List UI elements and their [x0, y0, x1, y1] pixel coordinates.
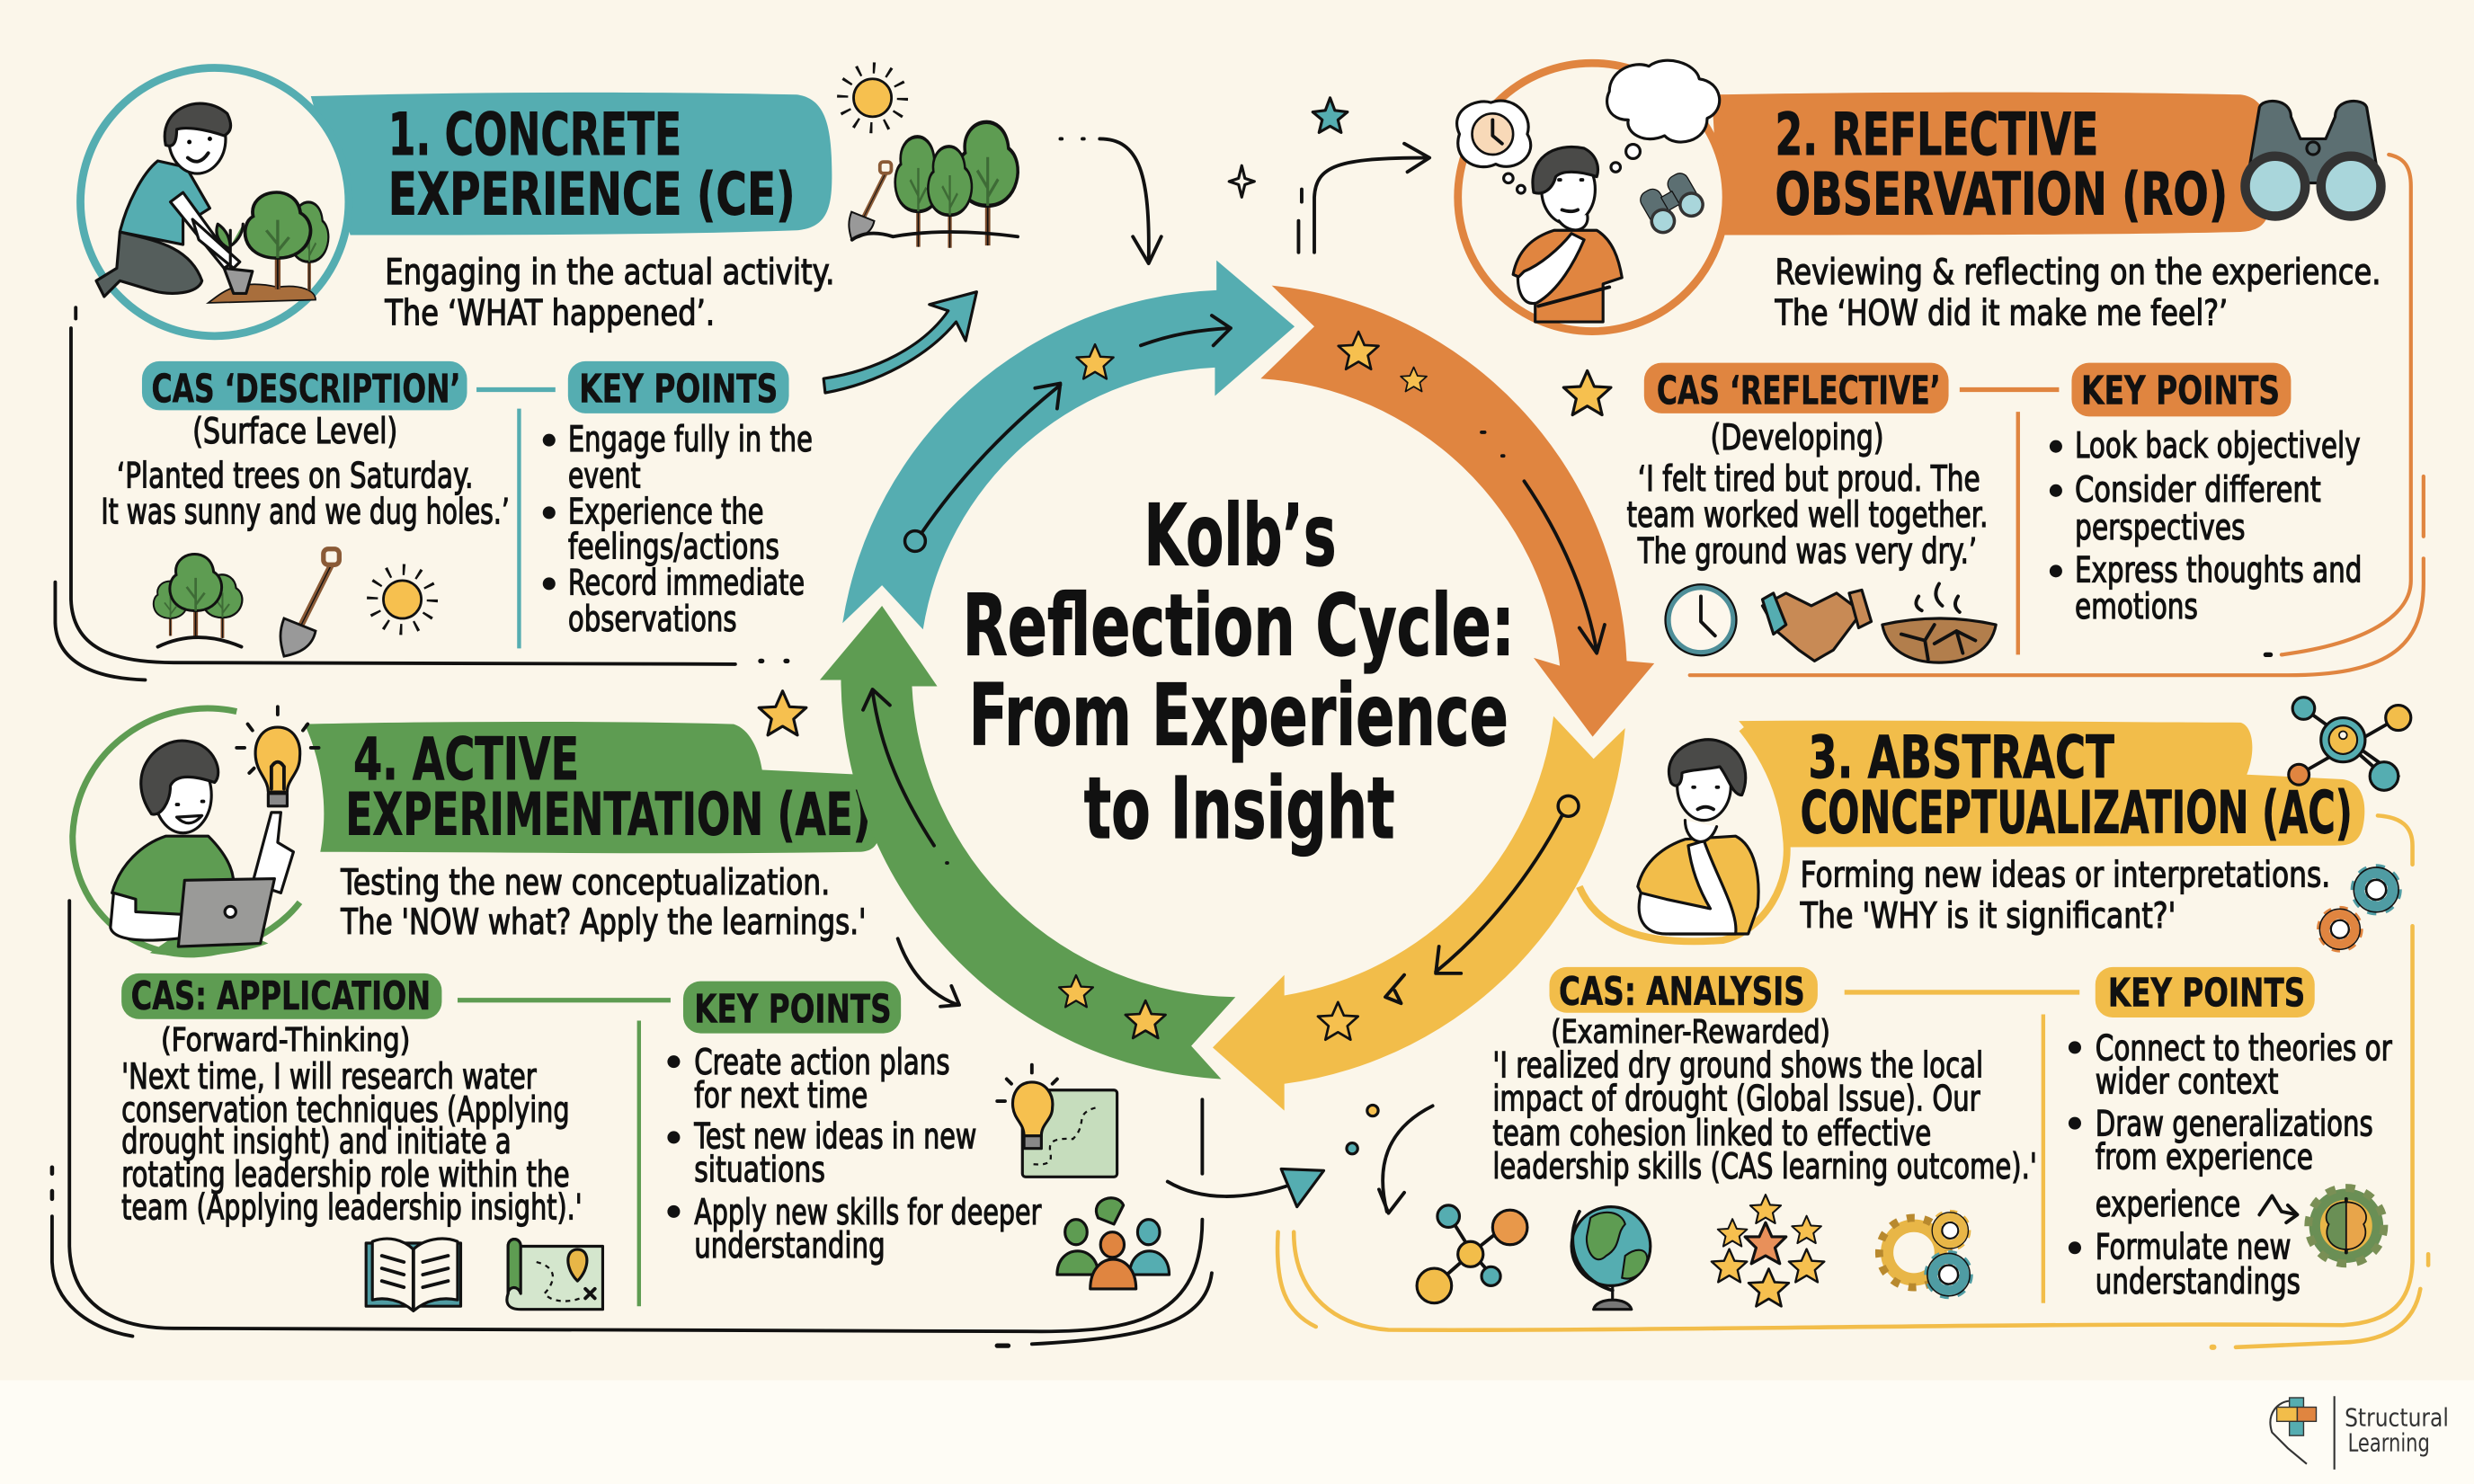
description text: The ‘WHAT happened’.	[384, 293, 715, 334]
icon: brain gear	[2309, 1188, 2384, 1264]
icon: network nodes	[2289, 698, 2411, 790]
character: person thinking with thought bubbles	[1457, 60, 1726, 332]
arrow: green segment	[820, 606, 1235, 1079]
key points list: Experience the	[568, 492, 763, 533]
CAS analysis text: 'I realized dry ground shows the local	[1492, 1045, 1983, 1087]
icon: small binoculars	[1636, 170, 1707, 236]
description text: Forming new ideas or interpretations.	[1801, 854, 2330, 895]
panel frame lines	[1690, 155, 2424, 675]
CAS analysis text	[1492, 1014, 2037, 1187]
pill: key points: KEY POINTS	[579, 367, 778, 413]
icon: group of people	[1057, 1198, 1170, 1289]
connector arrows: top centre	[1060, 98, 1429, 263]
key points list	[543, 419, 813, 640]
key points list: Record immediate	[568, 563, 805, 604]
key points list: perspectives	[2075, 507, 2246, 548]
title: to Insight	[1084, 760, 1395, 858]
logo: Structural Learning: Learning	[2348, 1430, 2430, 1458]
arrow: small curved	[2259, 1195, 2297, 1222]
icon: lightbulb	[236, 706, 319, 806]
key points list	[2069, 1027, 2392, 1302]
description text: The 'NOW what? Apply the learnings.'	[340, 902, 867, 943]
key points list: Look back objectively	[2075, 425, 2361, 467]
star	[1563, 370, 1611, 415]
key points list: wider context	[2096, 1061, 2278, 1102]
CAS analysis text: team cohesion linked to effective	[1492, 1113, 1931, 1154]
description text: Testing the new conceptualization.	[340, 862, 830, 903]
header banner: abstract conceptualization: 3. ABSTRACT	[1808, 724, 2114, 792]
description text	[384, 252, 834, 334]
panel: 2 reflective observation	[1457, 60, 2424, 675]
header banner: active experimentation	[305, 722, 879, 853]
CAS reflective text: team worked well together.	[1627, 494, 1988, 536]
CAS analysis text: leadership skills (CAS learning outcome).'	[1492, 1146, 2037, 1187]
cycle diagram	[820, 261, 1654, 1111]
character: person planting a tree	[81, 67, 349, 336]
CAS application text: 'Next time, I will research water	[121, 1056, 537, 1097]
header banner: reflective observation	[1712, 93, 2272, 235]
star	[759, 691, 806, 735]
panel: 4 active experimentation	[52, 691, 1324, 1346]
key points list: Engage fully in the	[568, 419, 813, 460]
pill: key points	[568, 361, 789, 413]
CAS description text	[101, 411, 510, 533]
CAS application text: rotating leadership role within the	[121, 1154, 570, 1195]
key points list: Create action plans	[694, 1042, 950, 1083]
key points list: emotions	[2075, 586, 2198, 627]
key points list: Draw generalizations	[2096, 1104, 2373, 1145]
CAS description text: It was sunny and we dug holes.’	[101, 492, 510, 533]
title	[963, 486, 1515, 858]
key points list: observations	[568, 599, 737, 640]
CAS application text: team (Applying leadership insight).'	[121, 1187, 583, 1229]
icon: large binoculars	[2246, 101, 2381, 216]
key points list: event	[568, 455, 641, 496]
CAS application text	[121, 1022, 583, 1229]
CAS reflective text	[1627, 417, 1988, 573]
CAS analysis text: (Examiner-Rewarded)	[1551, 1014, 1830, 1051]
pill: key points	[2071, 363, 2291, 416]
description text	[1775, 252, 2381, 334]
CAS reflective text: ‘I felt tired but proud. The	[1638, 458, 1980, 500]
icons: sun shovel trees top	[842, 67, 1018, 248]
thought bubble: clock	[1457, 101, 1531, 167]
panel frame lines	[55, 307, 788, 680]
panel frame lines	[52, 901, 1212, 1346]
logo: Structural Learning	[2270, 1396, 2449, 1470]
pill: key points	[2096, 967, 2315, 1017]
arrow: teal to cycle	[823, 292, 976, 393]
key points list: Consider different	[2075, 469, 2321, 511]
pill: key points: KEY POINTS	[694, 986, 892, 1032]
CAS analysis text: impact of drought (Global Issue). Our	[1492, 1079, 1980, 1120]
CAS description text: (Surface Level)	[192, 411, 397, 452]
key points list: understandings	[2096, 1261, 2300, 1302]
icons: molecule globe stars gears	[1417, 1195, 1970, 1310]
arrow: orange segment	[1260, 286, 1654, 737]
arrow: black curved to key points	[898, 938, 959, 1007]
pill: CAS analysis: CAS: ANALYSIS	[1559, 969, 1805, 1015]
panel frame lines	[1277, 815, 2428, 1347]
description text: The ‘HOW did it make me feel?’	[1775, 293, 2228, 334]
key points list: from experience	[2096, 1137, 2313, 1178]
key points list: for next time	[694, 1075, 868, 1116]
pill: CAS description	[142, 361, 467, 413]
pill: CAS application: CAS: APPLICATION	[131, 973, 431, 1019]
panel: 1 concrete experience	[55, 67, 1018, 680]
key points list	[667, 1042, 1042, 1266]
pill: CAS reflective: CAS ‘REFLECTIVE’	[1657, 368, 1941, 413]
title: Kolb’s	[1144, 486, 1337, 585]
key points list: situations	[694, 1150, 825, 1191]
icons: clock handshake cracked soil	[1666, 583, 1996, 662]
icons: trees shovel sun	[154, 549, 432, 656]
pill: CAS description: CAS ‘DESCRIPTION’	[151, 367, 460, 413]
character: person with laptop and idea	[73, 708, 299, 956]
description text	[340, 862, 867, 943]
description text: Engaging in the actual activity.	[385, 252, 834, 293]
arrow: to abstract panel	[1168, 1169, 1324, 1207]
key points list: Formulate new	[2096, 1227, 2291, 1268]
header banner: active experimentation: 4. ACTIVE	[353, 726, 579, 794]
CAS reflective text: (Developing)	[1711, 417, 1884, 458]
header banner: concrete experience	[311, 93, 832, 235]
header banner: active experimentation: EXPERIMENTATION (AE)	[345, 781, 871, 849]
arrow: teal segment	[842, 261, 1295, 629]
character: person thinking	[1580, 729, 1787, 941]
icons: book and treasure map	[366, 1239, 602, 1311]
title: From Experience	[969, 666, 1508, 765]
key points list: Test new ideas in new	[694, 1116, 976, 1158]
pill: key points	[683, 982, 901, 1034]
CAS application text: drought insight) and initiate a	[121, 1121, 512, 1162]
key points list: understanding	[694, 1225, 885, 1266]
header banner: concrete experience: EXPERIENCE (CE)	[388, 162, 796, 229]
CAS application text: conservation techniques (Applying	[121, 1089, 570, 1131]
header banner: reflective observation: 2. REFLECTIVE	[1775, 102, 2098, 169]
curved arrow and dots	[1347, 1105, 1433, 1213]
panel: 3 abstract conceptualization	[1277, 698, 2428, 1347]
CAS application text: (Forward-Thinking)	[161, 1022, 410, 1059]
CAS reflective text: The ground was very dry.’	[1637, 531, 1977, 573]
pill: key points: KEY POINTS	[2081, 368, 2280, 413]
description text: The 'WHY is it significant?'	[1800, 895, 2176, 937]
description text	[1800, 854, 2330, 937]
thought bubble: empty cloud	[1607, 60, 1720, 142]
header banner: concrete experience: 1. CONCRETE	[388, 102, 681, 169]
key points list: Apply new skills for deeper	[694, 1192, 1042, 1233]
logo: Structural Learning: Structural	[2345, 1405, 2449, 1433]
arrow: yellow segment	[1213, 716, 1625, 1111]
CAS description text: ‘Planted trees on Saturday.	[117, 455, 474, 496]
key points list: Express thoughts and	[2075, 550, 2362, 591]
header banner: reflective observation: OBSERVATION (RO)	[1775, 162, 2228, 229]
key points list: feelings/actions	[568, 526, 779, 567]
header banner: abstract conceptualization	[1739, 721, 2364, 848]
key points list	[2050, 425, 2362, 627]
pill: CAS reflective	[1644, 363, 1949, 413]
key points list: experience	[2096, 1184, 2240, 1225]
icon: gears	[2319, 867, 2398, 949]
title: Reflection Cycle:	[963, 576, 1515, 675]
pill: key points: KEY POINTS	[2108, 971, 2305, 1017]
icon: bulb and map	[997, 1065, 1117, 1177]
